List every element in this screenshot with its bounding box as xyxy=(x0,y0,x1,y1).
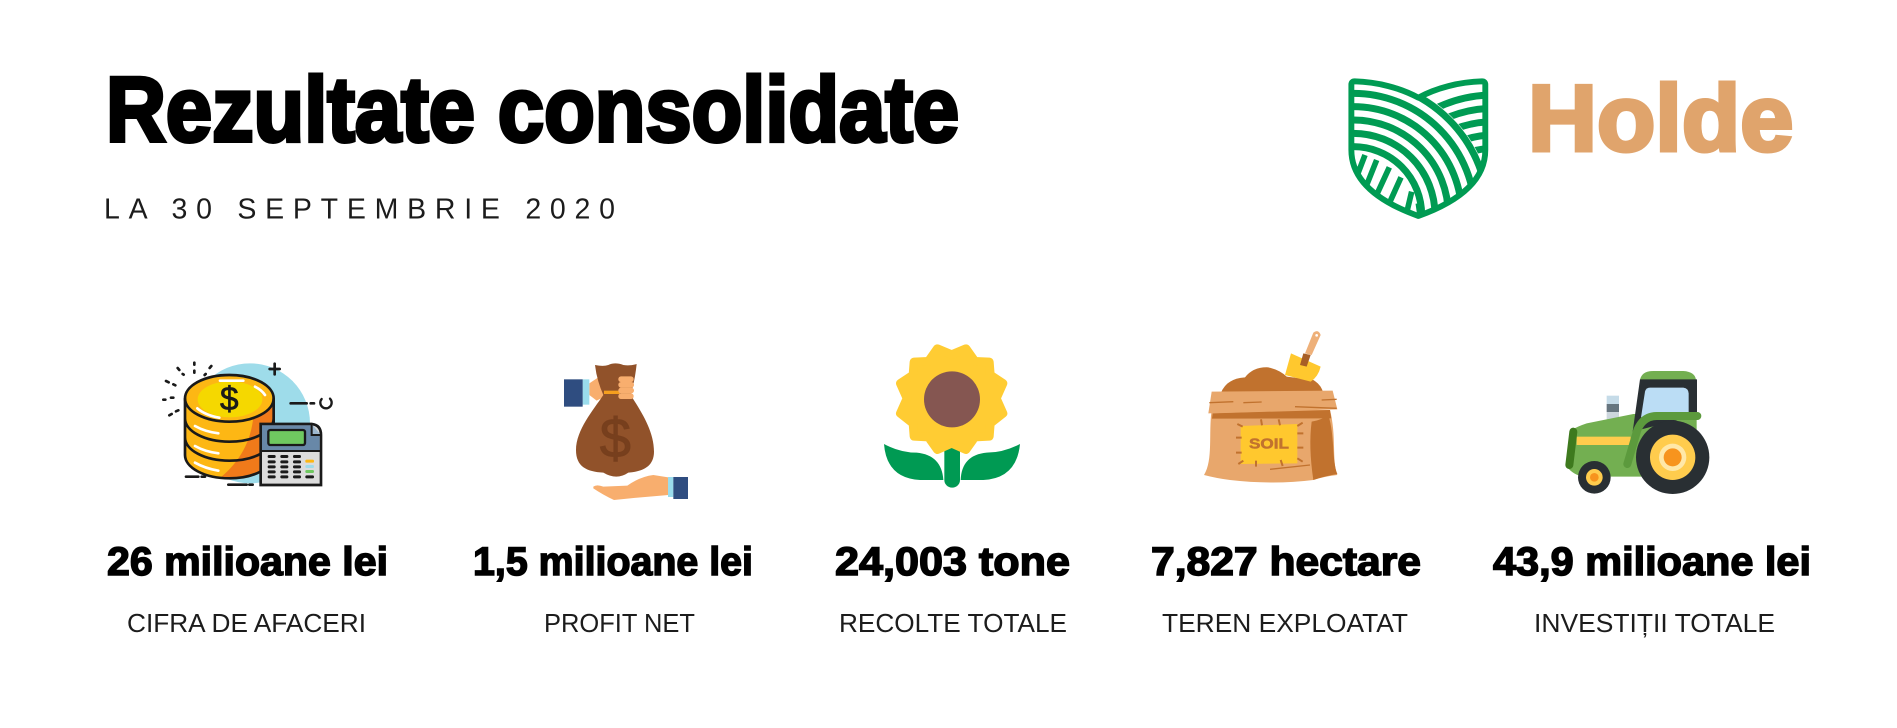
icon: sunflower xyxy=(884,349,1020,488)
stat: investitii totale xyxy=(1493,371,1811,638)
icon: tractor xyxy=(1567,371,1709,494)
icon: coin stack and calculator: $ xyxy=(220,381,239,418)
label: CIFRA DE AFACERI xyxy=(127,610,366,638)
stat: profit net xyxy=(473,363,753,638)
wordmark: Holde xyxy=(1528,66,1793,171)
label: TEREN EXPLOATAT xyxy=(1162,610,1408,638)
icon: money bag between hands: $ xyxy=(600,406,631,469)
icon: soil sack xyxy=(1204,331,1337,482)
infographic canvas xyxy=(106,72,1809,638)
value: 43,9 milioane lei xyxy=(1493,540,1811,584)
stat: recolte totale xyxy=(835,349,1070,638)
logo: Holde xyxy=(1348,78,1792,219)
value: 26 milioane lei xyxy=(107,540,388,584)
value: 7,827 hectare xyxy=(1151,540,1421,584)
value: 1,5 milioane lei xyxy=(473,540,753,584)
label: PROFIT NET xyxy=(544,610,695,638)
stat: cifra de afaceri xyxy=(107,363,388,638)
label: INVESTIȚII TOTALE xyxy=(1534,610,1775,638)
icon: soil sack: SOIL xyxy=(1249,435,1289,452)
icon: green shield xyxy=(1348,78,1488,219)
subtitle: LA 30 SEPTEMBRIE 2020 xyxy=(104,194,615,226)
title: Rezultate consolidate xyxy=(106,59,959,161)
icon: coin stack and calculator xyxy=(163,363,332,485)
icon: money bag between hands xyxy=(564,363,688,500)
value: 24,003 tone xyxy=(835,540,1070,584)
stat: teren exploatat xyxy=(1151,331,1421,638)
label: RECOLTE TOTALE xyxy=(839,610,1067,638)
